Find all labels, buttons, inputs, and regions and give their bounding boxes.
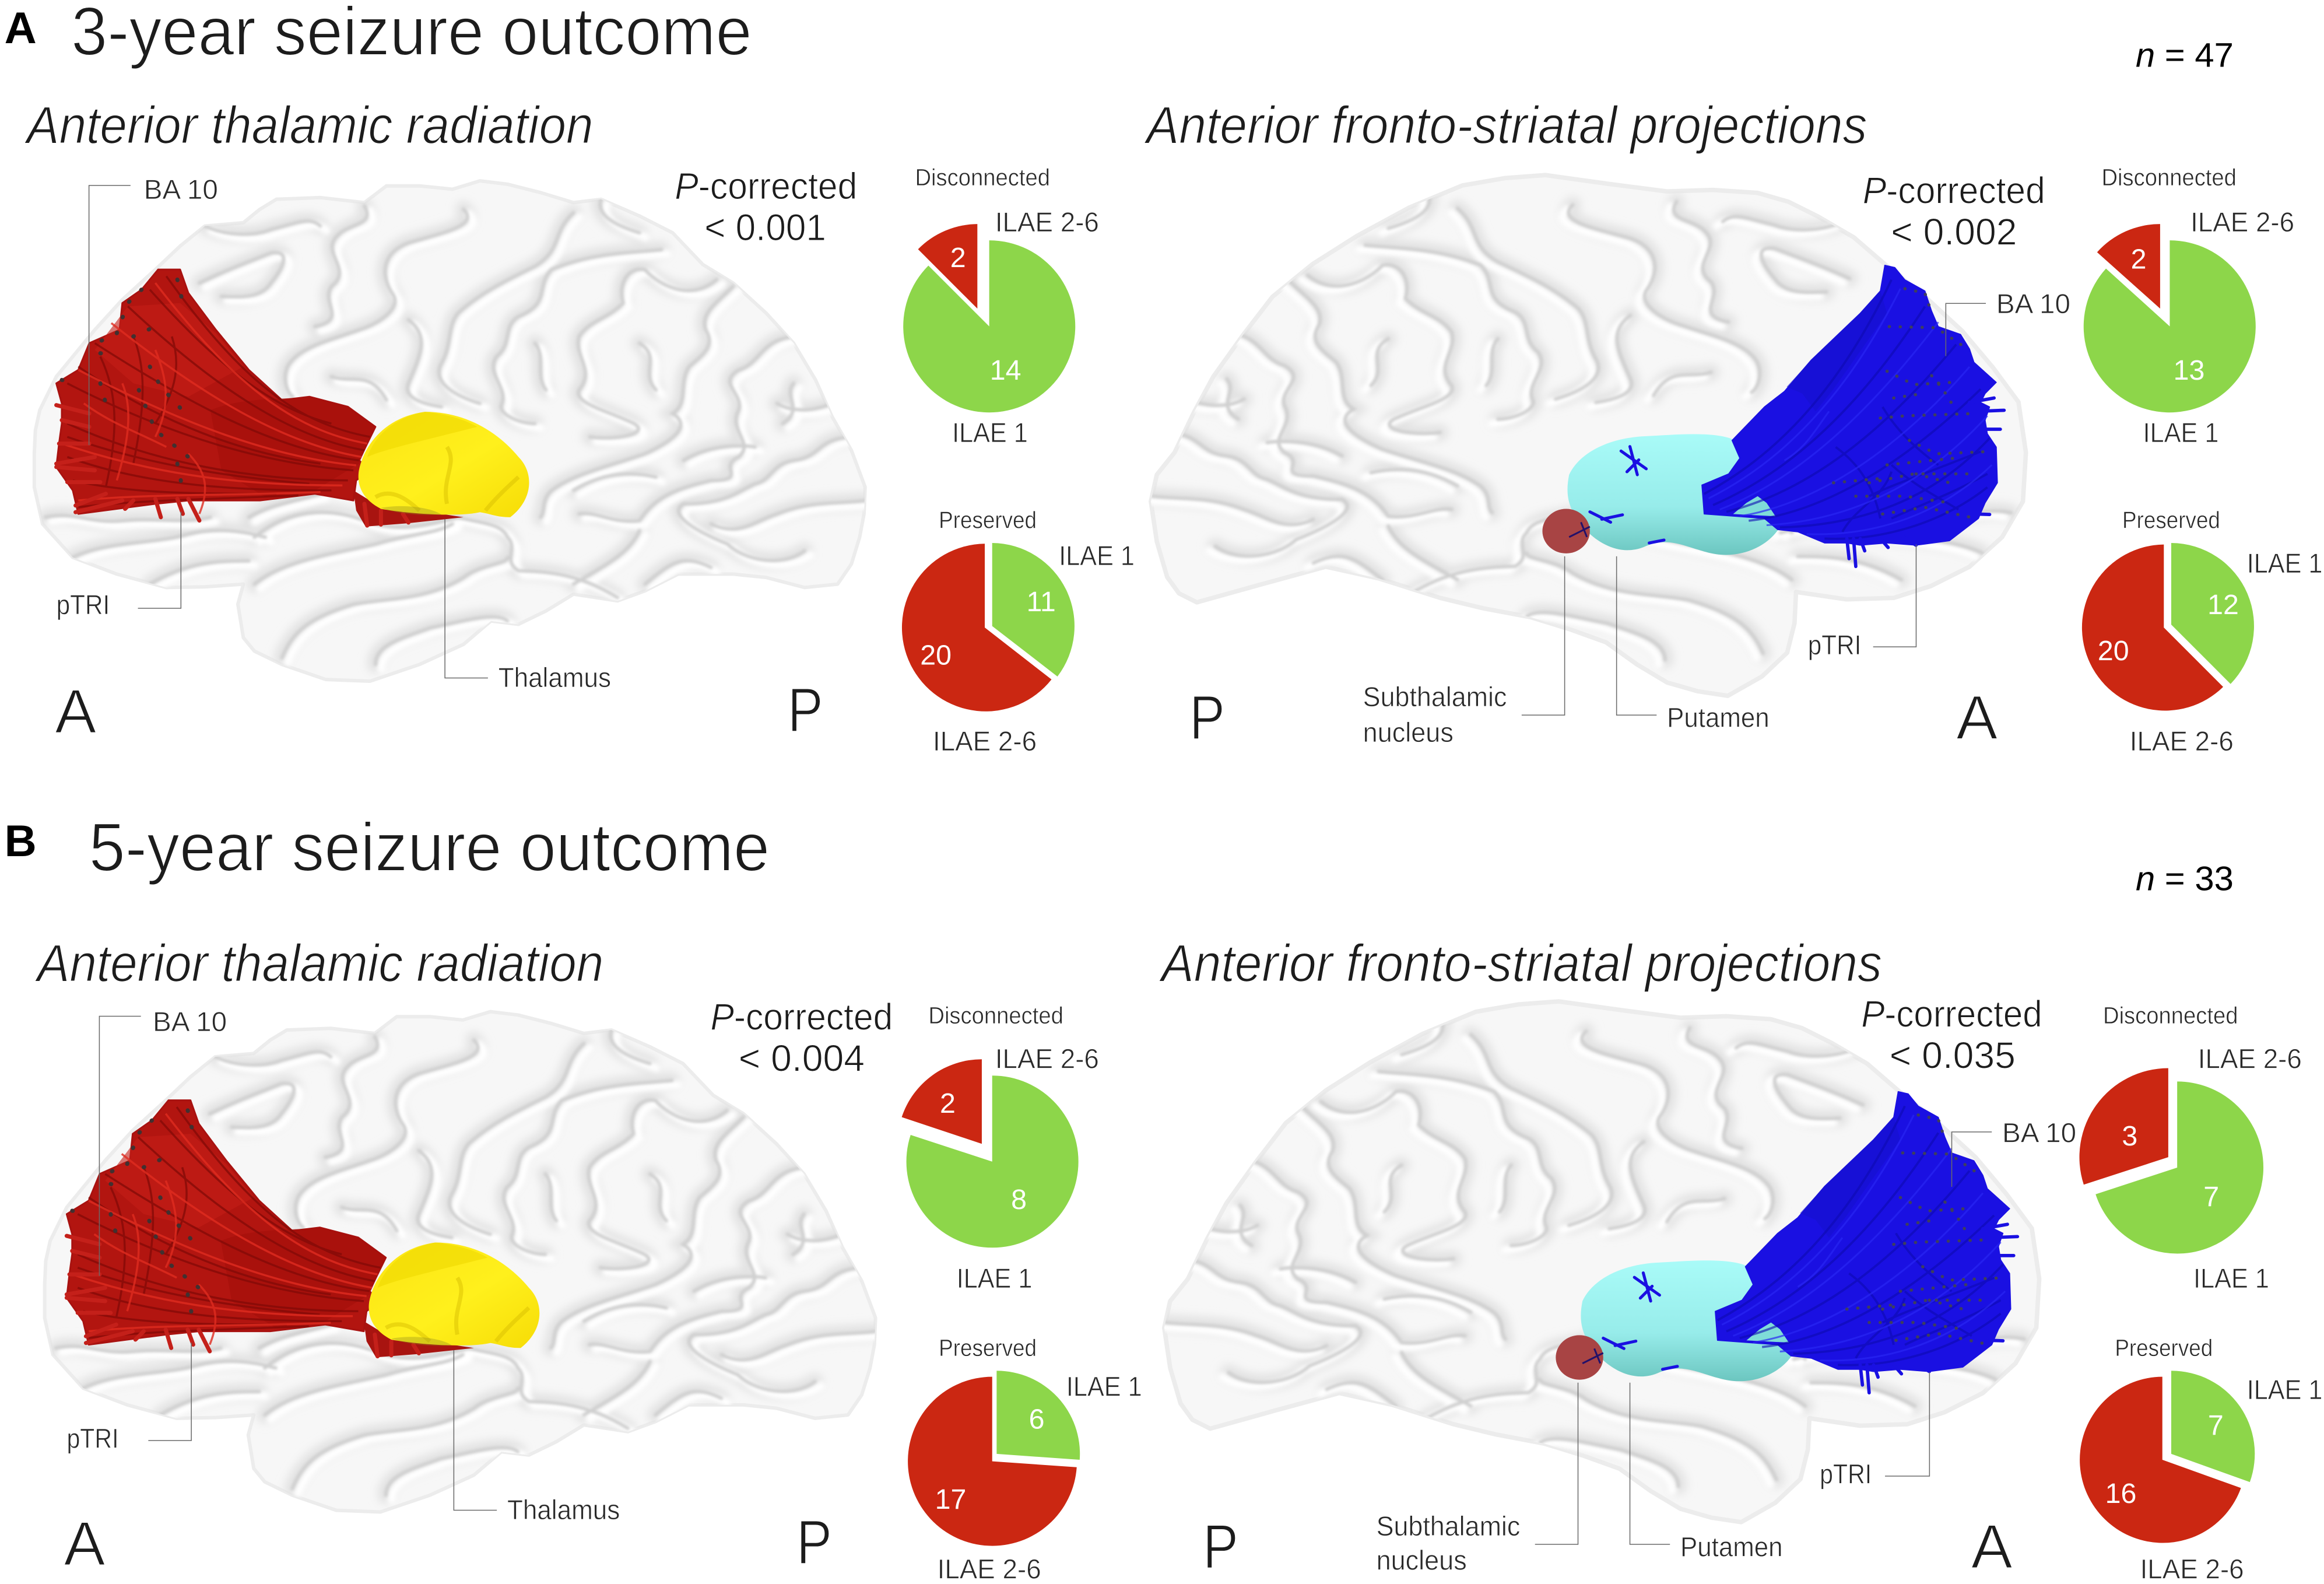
panel: A 3-year seizure outcome	[5, 0, 2322, 756]
panel label A: A	[5, 3, 37, 53]
label BA 10: BA 10	[2002, 1117, 2076, 1148]
P-value	[675, 166, 857, 248]
pie: preserved: Preserved	[939, 1334, 1037, 1361]
label Thalamus: Thalamus	[498, 662, 611, 693]
title: 5-year: 5-year seizure outcome	[89, 809, 770, 885]
anterior marker: A	[64, 1509, 106, 1579]
pie: disconnected: 2	[950, 242, 966, 274]
pie: disconnected: ILAE 2-6	[995, 1043, 1099, 1074]
label subthalamic nucleus: Subthalamic	[1363, 681, 1507, 712]
P-value: < 0.001	[704, 207, 826, 248]
pie: preserved: ILAE 1	[1059, 540, 1135, 571]
label BA 10: BA 10	[153, 1006, 227, 1037]
label subthalamic nucleus	[1377, 1383, 1578, 1575]
P-value: P-corrected	[1861, 993, 2042, 1035]
pie: preserved	[908, 1334, 1142, 1584]
subpanel: anterior fronto-striatal projections 3-year	[1144, 96, 2322, 756]
subtitle: Anterior fronto-striatal projections	[1144, 96, 1867, 155]
subpanel: anterior thalamic radiation 5-year	[34, 934, 1142, 1584]
pie: disconnected: Disconnected	[928, 1002, 1063, 1029]
pie: disconnected: 7	[2203, 1181, 2219, 1212]
pie: preserved	[2082, 507, 2322, 756]
label subthalamic nucleus: Subthalamic	[1377, 1511, 1520, 1541]
anterior marker: A	[1956, 682, 1998, 752]
label BA 10	[99, 1006, 227, 1276]
pie: preserved: 6	[1029, 1404, 1045, 1435]
brain with red tract and yellow thalamus	[45, 1012, 882, 1512]
pie: disconnected: ILAE 2-6	[2190, 206, 2294, 237]
pie: disconnected: 14	[990, 355, 1021, 386]
subtitle: Anterior thalamic radiation	[24, 96, 593, 155]
label subthalamic nucleus: nucleus	[1363, 717, 1454, 748]
posterior marker: P	[796, 1507, 832, 1577]
posterior marker: P	[1189, 682, 1225, 752]
pie: disconnected: ILAE 1	[952, 417, 1028, 448]
label pTRI: pTRI	[66, 1423, 118, 1454]
panel label B: B	[5, 816, 37, 866]
label pTRI	[66, 1343, 191, 1454]
label Thalamus	[445, 519, 611, 693]
label pTRI: pTRI	[1808, 629, 1861, 660]
pie: preserved: ILAE 2-6	[938, 1554, 1041, 1584]
label Thalamus	[454, 1350, 620, 1525]
subpanel: anterior thalamic radiation 3-year	[24, 96, 1135, 756]
pie: disconnected	[903, 164, 1099, 448]
label BA 10	[1952, 1117, 2076, 1187]
posterior marker: P	[788, 675, 823, 745]
pie: preserved: ILAE 2-6	[933, 726, 1037, 756]
pie: preserved: ILAE 2-6	[2130, 726, 2234, 756]
pie: disconnected	[902, 1002, 1099, 1294]
pie: disconnected: 2	[940, 1088, 956, 1119]
P-value: < 0.002	[1891, 212, 2017, 253]
panel: B 5-year seizure outcome	[5, 809, 2322, 1584]
P-value	[710, 996, 893, 1080]
brain with blue tract, cyan putamen and subthalamic nucleus	[1159, 1001, 2039, 1522]
label Putamen: Putamen	[1680, 1531, 1783, 1562]
label BA 10: BA 10	[144, 174, 218, 205]
P-value: < 0.035	[1890, 1035, 2016, 1077]
pie: disconnected: ILAE 1	[2143, 417, 2218, 448]
label Putamen	[1617, 556, 1770, 733]
sample size n = 47: n = 47	[2136, 37, 2234, 75]
posterior marker: P	[1203, 1512, 1238, 1582]
label subthalamic nucleus: nucleus	[1377, 1544, 1467, 1575]
pie: preserved: 7	[2208, 1410, 2224, 1441]
pie: preserved: 17	[935, 1484, 966, 1515]
pie: disconnected	[2084, 164, 2294, 448]
P-value: P-corrected	[1863, 170, 2045, 212]
pie: disconnected: Disconnected	[915, 164, 1050, 191]
pie: preserved: ILAE 1	[1066, 1371, 1142, 1402]
pie: disconnected	[2079, 1002, 2302, 1294]
pie: disconnected: ILAE 1	[957, 1263, 1032, 1294]
brain with red tract and yellow thalamus	[34, 181, 871, 681]
subtitle: Anterior thalamic radiation	[34, 934, 603, 993]
label Thalamus: Thalamus	[507, 1494, 620, 1525]
P-value	[1863, 170, 2045, 253]
pie: preserved: 20	[920, 640, 952, 671]
pie: preserved: 20	[2098, 635, 2129, 667]
label pTRI	[57, 512, 181, 620]
pie: disconnected: Disconnected	[2101, 164, 2237, 191]
subpanel: anterior fronto-striatal projections 5-year	[1159, 934, 2322, 1584]
brain with blue tract, cyan putamen and subthalamic nucleus	[1146, 175, 2026, 696]
pie: preserved: Preserved	[939, 507, 1037, 534]
pie: preserved: 12	[2207, 589, 2239, 621]
pie: preserved: Preserved	[2115, 1334, 2213, 1361]
pie: disconnected: 13	[2174, 355, 2204, 386]
label subthalamic nucleus	[1363, 556, 1565, 748]
pie: preserved: 11	[1027, 586, 1056, 618]
anterior marker: A	[55, 677, 97, 747]
pie: disconnected: 3	[2122, 1120, 2137, 1152]
pie: preserved	[902, 507, 1135, 756]
sample size n = 33: n = 33	[2136, 860, 2234, 898]
label pTRI: pTRI	[1820, 1459, 1872, 1490]
P-value: < 0.004	[739, 1038, 865, 1080]
pie: preserved: ILAE 2-6	[2140, 1554, 2244, 1584]
pie: disconnected: ILAE 2-6	[2198, 1043, 2302, 1074]
anterior marker: A	[1971, 1512, 2013, 1582]
label pTRI: pTRI	[57, 589, 110, 620]
label BA 10	[1946, 288, 2070, 356]
label BA 10	[89, 174, 218, 445]
pie: preserved	[2080, 1334, 2322, 1584]
pie: preserved: Preserved	[2122, 507, 2220, 534]
label Putamen: Putamen	[1667, 702, 1770, 733]
P-value	[1861, 993, 2042, 1077]
label BA 10: BA 10	[1996, 288, 2070, 319]
label pTRI	[1820, 1372, 1929, 1490]
pie: disconnected: ILAE 1	[2193, 1263, 2269, 1294]
pie: disconnected: Disconnected	[2103, 1002, 2238, 1029]
label pTRI	[1808, 545, 1916, 660]
pie: preserved: 16	[2105, 1478, 2136, 1509]
subtitle: Anterior fronto-striatal projections	[1159, 934, 1882, 993]
P-value: P-corrected	[675, 166, 857, 207]
pie: disconnected: 2	[2131, 243, 2146, 275]
pie: disconnected: 8	[1011, 1184, 1027, 1215]
label Putamen	[1630, 1383, 1783, 1562]
P-value: P-corrected	[710, 996, 893, 1038]
pie: disconnected: ILAE 2-6	[995, 206, 1099, 237]
